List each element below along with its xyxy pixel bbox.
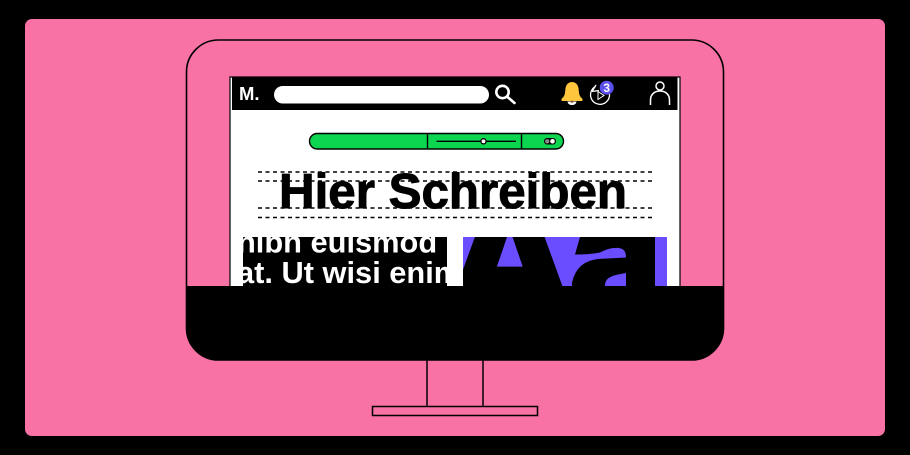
type specimen panel: A	[443, 157, 577, 363]
search field	[274, 86, 489, 104]
icon: user	[650, 82, 670, 105]
text sample panel: at. Ut wisi enim	[237, 255, 461, 290]
navigation bar	[232, 77, 678, 110]
type specimen panel	[463, 237, 667, 286]
monitor frame	[186, 40, 724, 360]
heading: Hier Schreiben	[279, 165, 627, 219]
icon: bell	[562, 82, 582, 105]
heading guide lines	[258, 172, 652, 218]
monitor chin	[186, 286, 724, 360]
browser window	[229, 76, 681, 286]
toggle	[544, 138, 556, 144]
text sample panel: nibh euismod	[237, 224, 437, 260]
slider knob	[481, 139, 486, 144]
type specimen panel: a	[569, 144, 662, 372]
icon: replay with badge: 3	[603, 81, 610, 95]
icon: replay with badge	[591, 81, 614, 104]
monitor stand	[372, 360, 538, 416]
icon: magnifier	[496, 86, 514, 103]
text sample panel	[243, 237, 447, 286]
logo: M.	[239, 83, 260, 104]
green toolbar	[310, 134, 564, 149]
